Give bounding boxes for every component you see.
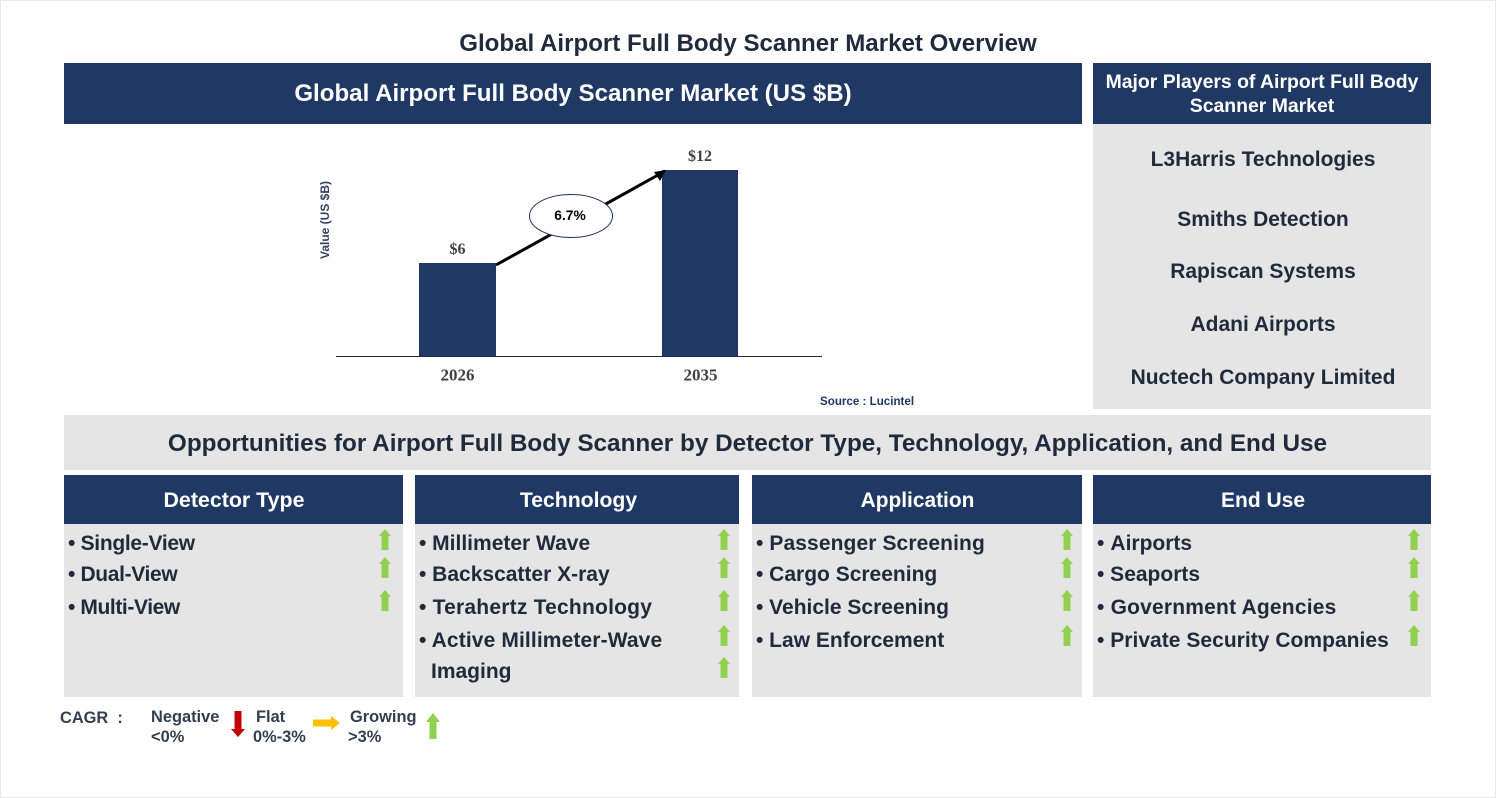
item: • Cargo Screening bbox=[756, 562, 937, 586]
legend flat: Flat bbox=[256, 708, 285, 726]
heading: Application bbox=[861, 488, 974, 512]
legend negative: <0% bbox=[151, 728, 184, 746]
panel: major players bbox=[1093, 124, 1431, 409]
legend growing: >3% bbox=[348, 728, 381, 746]
player: Adani Airports: Adani Airports bbox=[1190, 312, 1336, 336]
item: • Airports bbox=[1097, 532, 1192, 554]
chart header: Global Airport Full Body Scanner Market (US $B) bbox=[294, 80, 852, 106]
item: • Terahertz Technology bbox=[419, 596, 652, 618]
players header bbox=[1093, 63, 1431, 124]
heading bbox=[415, 475, 739, 524]
players header: Major Players of Airport Full Body bbox=[1106, 71, 1418, 93]
icon: yellow right arrow bbox=[313, 716, 340, 730]
heading: End Use bbox=[1221, 488, 1305, 512]
legend label CAGR: CAGR : bbox=[60, 709, 123, 727]
heading bbox=[1093, 475, 1431, 524]
opportunities banner: Opportunities for Airport Full Body Scanner by Detector Type, Technology, Application, and End Use bbox=[168, 430, 1327, 457]
item: • Government Agencies bbox=[1097, 596, 1337, 618]
item: Imaging bbox=[431, 660, 512, 682]
heading bbox=[752, 475, 1082, 524]
player: Smiths Detection: Smiths Detection bbox=[1177, 208, 1349, 230]
heading: Technology bbox=[520, 488, 637, 512]
item: • Backscatter X-ray bbox=[419, 562, 610, 586]
player: Nuctech Company Limited: Nuctech Company Limited bbox=[1131, 366, 1395, 388]
year label 2035: 2035 bbox=[684, 366, 718, 384]
legend growing bbox=[348, 708, 416, 746]
bar 2026 bbox=[419, 263, 496, 356]
item: • Active Millimeter-Wave bbox=[419, 628, 662, 652]
item: • Single-View bbox=[68, 532, 195, 554]
panel: end use bbox=[1093, 475, 1431, 697]
chart header bbox=[64, 63, 1082, 124]
item: • Multi-View bbox=[68, 596, 180, 618]
CAGR ellipse bbox=[530, 194, 612, 238]
legend flat bbox=[253, 708, 306, 746]
icon: red down arrow bbox=[231, 711, 245, 737]
source: Source : Lucintel bbox=[820, 395, 914, 408]
CAGR ellipse: 6.7% bbox=[554, 208, 586, 223]
legend negative: Negative bbox=[151, 708, 219, 726]
item: • Private Security Companies bbox=[1097, 628, 1389, 652]
item: • Law Enforcement bbox=[756, 628, 944, 652]
panel: application bbox=[752, 475, 1082, 697]
value label $12: $12 bbox=[688, 148, 712, 165]
bar 2035 bbox=[662, 170, 738, 356]
item: • Seaports bbox=[1097, 562, 1200, 586]
axis bbox=[336, 356, 822, 358]
panel: technology bbox=[415, 475, 739, 697]
panel: detector type bbox=[64, 475, 403, 697]
y axis label: Value (US $B) bbox=[318, 181, 332, 259]
item: • Passenger Screening bbox=[756, 532, 985, 554]
player: Rapiscan Systems: Rapiscan Systems bbox=[1170, 260, 1356, 282]
bar chart bbox=[318, 148, 914, 408]
player: L3Harris Technologies: L3Harris Technologies bbox=[1151, 148, 1375, 170]
heading bbox=[64, 475, 403, 524]
legend flat: 0%-3% bbox=[253, 728, 306, 746]
legend bbox=[60, 708, 440, 746]
year label 2026: 2026 bbox=[440, 366, 474, 384]
icon: green up arrow bbox=[426, 713, 440, 739]
title: Global Airport Full Body Scanner Market Overview bbox=[459, 30, 1037, 57]
item: • Millimeter Wave bbox=[419, 532, 590, 554]
item: • Dual-View bbox=[68, 562, 177, 586]
legend growing: Growing bbox=[350, 708, 416, 726]
item: • Vehicle Screening bbox=[756, 596, 949, 618]
legend negative bbox=[151, 708, 219, 746]
opportunities banner bbox=[64, 415, 1431, 470]
growth arrow bbox=[496, 170, 666, 265]
value label $6: $6 bbox=[450, 241, 466, 258]
heading: Detector Type bbox=[163, 488, 305, 512]
players header: Scanner Market bbox=[1190, 95, 1334, 117]
